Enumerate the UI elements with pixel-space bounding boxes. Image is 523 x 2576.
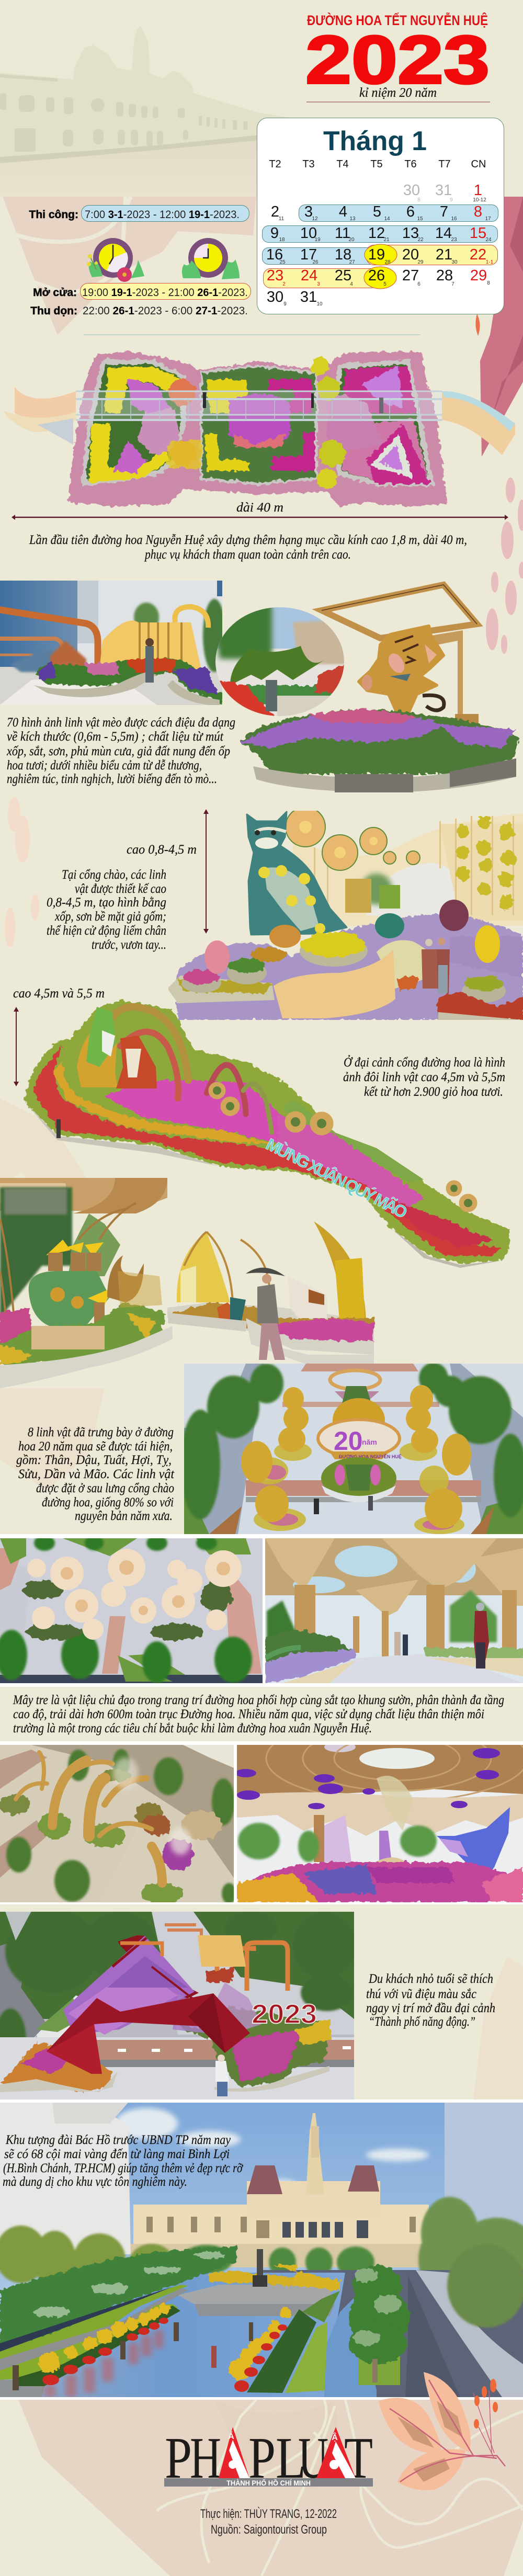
text block: statue area: (H.Bình Chánh, TP.HCM) giúp tăng thêm vẻ đẹp rực rỡ xyxy=(3,2161,243,2175)
calendar weekday row: T4 xyxy=(336,158,349,170)
calendar dates: 18 xyxy=(335,246,351,263)
schedule: thi công: Thi công: xyxy=(29,209,78,221)
calendar dates: 21 xyxy=(436,246,452,263)
faded background: city hall photo xyxy=(0,26,288,197)
calendar dates: 18 xyxy=(279,237,285,243)
photo: 20 years plaza aerial xyxy=(180,1363,523,1534)
calendar construction range highlight xyxy=(263,205,498,265)
arrow: height 4.5-5.5 m xyxy=(14,1007,19,1086)
photo: statue plaza and city hall xyxy=(0,2103,523,2397)
white separators xyxy=(0,1534,523,2400)
glass bridge xyxy=(3,387,515,455)
text block: eight mascots: gồm: Thân, Dậu, Tuất, Hợi, Tỵ, xyxy=(16,1453,172,1467)
dimension: bridge length xyxy=(12,501,508,520)
title xyxy=(305,12,490,100)
photo: bamboo arches aerial xyxy=(0,1745,236,1904)
big mai tree column xyxy=(349,2265,410,2364)
pot reflections xyxy=(44,2330,164,2397)
calendar dates: 22 xyxy=(417,237,424,243)
calendar dates: 7 xyxy=(440,203,448,220)
logo: Pháp Luật: P xyxy=(248,2426,276,2491)
calendar dates: 16 xyxy=(451,216,457,222)
left tree row xyxy=(0,2246,238,2350)
text block: young visitors: Du khách nhỏ tuổi sẽ thích xyxy=(368,1972,493,1986)
grass, road and hedge left xyxy=(0,2285,188,2360)
schedule: mở cửa: Mở cửa: xyxy=(33,287,77,299)
subtitle: kỉ niệm 20 năm xyxy=(359,86,437,100)
logo: Pháp Luật xyxy=(164,2426,373,2491)
schedule: mở cửa xyxy=(33,283,251,299)
text block: eight mascots: được đặt ở sau lưng cổng chào xyxy=(36,1481,174,1495)
background: peach ovals left xyxy=(5,797,39,947)
text band: bamboo material xyxy=(0,1683,523,1745)
calendar weekday row: T5 xyxy=(370,158,383,170)
city hall xyxy=(131,2113,429,2267)
calendar dates: 26 xyxy=(368,267,385,284)
calendar dates: 20 xyxy=(348,237,355,243)
logo: Pháp Luật: THÀNH PHỐ HỒ CHÍ MINH xyxy=(226,2478,311,2487)
calendar dates: 23 xyxy=(267,267,283,284)
text block: mascots: hoa tươi; dưới nhiều biểu cảm từ dễ thương, xyxy=(7,758,202,773)
calendar dates: 12 xyxy=(368,225,385,242)
calendar dates: 25 xyxy=(335,267,351,284)
calendar dates: 5 xyxy=(373,203,381,220)
logo: Pháp Luật: T xyxy=(344,2426,373,2491)
calendar dates: 17 xyxy=(300,246,317,263)
text block: gate mascots: trước, vươn tay... xyxy=(92,938,166,952)
calendar dates: 14 xyxy=(384,216,390,222)
calendar dates: 2 xyxy=(271,203,279,220)
text block: statue area xyxy=(3,2133,243,2189)
flower beds xyxy=(175,914,523,1020)
calendar dates: 19 xyxy=(368,246,385,263)
calendar dates: 29 xyxy=(470,267,487,284)
flower medallions xyxy=(209,1082,477,1212)
calendar dates: 1-1 xyxy=(486,259,494,265)
calendar dates: 15 xyxy=(417,216,423,222)
text block: eight mascots xyxy=(16,1425,175,1523)
logo: Pháp Luật: L xyxy=(276,2426,306,2491)
arrow: height 0.8-4.5 m xyxy=(203,809,209,934)
photo: 20 years plaza aerial: năm xyxy=(362,1438,377,1446)
upper gray plaza xyxy=(178,2285,335,2307)
text block: mascots xyxy=(6,716,235,786)
calendar dates: 27 xyxy=(402,267,419,284)
text block: gate mascots: thể hiện cử động liếm chân xyxy=(47,924,166,938)
icon: clock closing xyxy=(182,238,240,279)
bamboo backdrop xyxy=(293,813,523,926)
text block: statue area: sẽ có 68 cội mai vàng đến từ làng mai Bình Lợi xyxy=(4,2147,230,2161)
calendar dates: 24 xyxy=(485,237,492,243)
calendar dates: 4 xyxy=(339,203,347,220)
title: year 2023: 2023 xyxy=(305,21,490,98)
background: rose petal right xyxy=(475,197,523,457)
icon: clock opening xyxy=(87,238,144,282)
schedule: thi công: 7:00 3-1-2023 - 12:00 19-1-2023. xyxy=(85,209,240,221)
calendar dates: 24 xyxy=(301,267,317,284)
text block: eight mascots: đường hoa, giống 80% so với xyxy=(42,1495,174,1510)
text block: statue area: Khu tượng đài Bác Hồ trước UBND TP năm nay xyxy=(5,2133,231,2147)
photo: 20 years plaza aerial: ĐƯỜNG HOA NGUYỄN HUỆ xyxy=(339,1454,402,1459)
footer credit: Thực hiện: THÙY TRANG, 12-2022 xyxy=(200,2507,337,2521)
calendar weekday row: T2 xyxy=(269,158,281,170)
text block: gate mascots: 0,8-4,5 m, tạo hình bằng xyxy=(47,895,166,910)
boxes and checker xyxy=(345,879,371,913)
text block: gate mascots: Tại cổng chào, các linh xyxy=(62,868,166,882)
calendar dates: 10 xyxy=(316,301,323,307)
text block: eight mascots: hoa 20 năm qua sẽ được tái hiện, xyxy=(18,1439,173,1454)
calendar dates: 12 xyxy=(312,216,318,222)
calendar dates: 22 xyxy=(470,246,486,263)
text band: bamboo material: trường là một trong các tiêu chí bắt buộc khi làm đường hoa xuân Nguyễn Huệ. xyxy=(13,1721,372,1735)
photo: 2023 red gate xyxy=(0,1909,356,2100)
schedule: thu dọn: 22:00 26-1-2023 - 6:00 27-1-2023. xyxy=(83,305,248,317)
calendar dates: 13 xyxy=(402,225,419,242)
text block: eight mascots: 8 linh vật đã trưng bày ở đường xyxy=(28,1425,174,1439)
calendar weekday row: T7 xyxy=(438,158,451,170)
bamboo dome scene with cow, rooster and visitor xyxy=(118,1221,374,1365)
text block: statue area: mà dung dị cho khu vực tôn nghiêm này. xyxy=(3,2175,187,2189)
photo: cat gate street xyxy=(0,581,226,705)
hedge and lawn xyxy=(247,2309,316,2393)
footer credit: Nguồn: Saigontourist Group xyxy=(211,2523,327,2537)
text block: gate mascots: vật được thiết kế cao xyxy=(75,882,166,896)
text block: glass bridge xyxy=(29,533,467,562)
calendar dates: 4 xyxy=(350,281,353,287)
decoration: leaves xyxy=(379,2372,505,2490)
calendar dates: 6 xyxy=(406,203,415,220)
logo: Pháp Luật: U xyxy=(298,2426,328,2491)
label: height 4.5 and 5.5 m: cao 4,5m và 5,5 m xyxy=(13,986,105,1001)
arches xyxy=(107,1007,272,1132)
calendar dates: 9 xyxy=(450,197,453,203)
calendar dates: 5 xyxy=(383,281,386,287)
logo: Pháp Luật: P xyxy=(165,2426,192,2491)
dimension: bridge length: dài 40 m xyxy=(236,501,283,515)
text block: young visitors: thú với vũ điệu màu sắc xyxy=(366,1987,476,2001)
logo: Pháp Luật: H xyxy=(190,2426,221,2491)
calendar dates: 20 xyxy=(402,246,419,263)
calendar dates: 2 xyxy=(282,281,286,287)
text block: mascots: nghiêm túc, tinh nghịch, lười biếng đến tò mò... xyxy=(7,772,217,786)
statue and yellow apricot xyxy=(208,2271,335,2288)
text block: glass bridge: Lần đầu tiên đường hoa Nguyễn Huệ xây dựng thêm hạng mục cầu kính cao 1,8 m, dài 40 m, xyxy=(29,533,467,547)
road right and plaza ground xyxy=(262,2270,523,2397)
calendar dates: 3 xyxy=(304,203,313,220)
text block: young visitors: ngay vị trí mở đầu đại cảnh xyxy=(366,2001,495,2015)
calendar dates: 15 xyxy=(470,225,486,242)
calendar dates: 11 xyxy=(279,216,285,222)
calendar dates: 21 xyxy=(383,237,390,243)
right sidewalk xyxy=(416,2270,523,2397)
calendar dates: 17 xyxy=(485,216,491,222)
title line: event name: ĐƯỜNG HOA TẾT NGUYỄN HUỆ xyxy=(307,12,488,28)
text block: mascots: 70 hình ảnh linh vật mèo được cách điệu đa dạng xyxy=(7,716,235,730)
plaza anniversary sign: 20 xyxy=(334,1426,363,1456)
text block: mascots: về kích thước (0,6m - 5,5m) ; chất liệu từ mút xyxy=(7,730,224,744)
calendar dates: 31 xyxy=(300,289,317,305)
calendar dates xyxy=(266,182,494,307)
calendar dates: 16 xyxy=(266,246,283,263)
photo: bamboo canopy aerial xyxy=(0,1535,263,1683)
gate sign 2023: 2023 xyxy=(252,1999,317,2029)
text block: eight mascots: nguyên bản năm xưa. xyxy=(75,1509,173,1523)
calendar weekday row xyxy=(269,158,486,170)
display greeting text: MỪNG XUÂN QUÝ MÃO xyxy=(263,1134,411,1222)
calendar weekday row: T6 xyxy=(404,158,417,170)
text block: glass bridge: phục vụ khách tham quan toàn cảnh trên cao. xyxy=(144,548,351,562)
text block: gateway mascots: ảnh đôi linh vật cao 4,5m và 5,5m xyxy=(343,1070,505,1084)
calendar dates: 28 xyxy=(436,267,453,284)
calendar dates: 29 xyxy=(417,259,424,265)
calendar dates: 9 xyxy=(270,225,279,242)
calendar dates: 27 xyxy=(349,259,355,265)
lower right bed xyxy=(462,985,506,1003)
calendar dates: 8 xyxy=(487,280,490,286)
calendar dates: 1 xyxy=(474,182,482,199)
footer credit xyxy=(200,2507,337,2537)
text block: gate mascots xyxy=(47,868,166,952)
label: height 0.8-4.5 m: cao 0,8-4,5 m xyxy=(127,843,197,857)
text block: gateway mascots xyxy=(343,1055,505,1099)
logo: Pháp Luật: Á xyxy=(228,2431,234,2441)
schedule panel xyxy=(29,205,251,317)
swoosh flower display: gate scene xyxy=(25,1000,510,1268)
photo: canopy with purple cat xyxy=(235,1716,523,1902)
text block: gateway mascots: kết từ hơn 2.900 giỏ hoa tươi. xyxy=(364,1085,503,1099)
calendar dates: 8 xyxy=(474,203,482,220)
schedule: thi công xyxy=(29,205,249,222)
calendar heading: Tháng 1 xyxy=(323,126,427,156)
calendar dates: 31 xyxy=(435,182,452,199)
cat sculpture with flower bed xyxy=(241,585,519,792)
calendar dates: 6 xyxy=(417,281,420,287)
background: pink ovals right xyxy=(486,478,523,654)
calendar dates: 9 xyxy=(283,301,287,307)
red pots and apricot trees right xyxy=(229,2307,291,2380)
visitors xyxy=(13,2322,253,2390)
flower-covered cats xyxy=(77,1007,118,1087)
calendar dates: 7 xyxy=(451,281,454,287)
calendar dates: 10 xyxy=(300,225,317,242)
buffalo sculpture scene xyxy=(0,1178,173,1392)
small cats xyxy=(204,940,230,974)
calendar dates: 19 xyxy=(314,237,321,243)
text block: eight mascots: Sửu, Dần và Mão. Các linh vật xyxy=(18,1467,175,1481)
text block: mascots: xốp, sắt, sơn, phủ mùn cưa, giả đất nung đến ốp xyxy=(6,744,230,758)
photo: topiary cat circle xyxy=(215,607,344,716)
gate scene: teal cat xyxy=(167,807,523,1020)
calendar dates: 30 xyxy=(267,289,283,305)
flower bed plan xyxy=(69,351,447,507)
text block: gate mascots: xốp, sơn bề mặt giả gốm; xyxy=(54,910,166,924)
background shape: pink watercolor behind schedule xyxy=(0,197,256,335)
footer panel xyxy=(0,2372,523,2576)
calendar dates: 14 xyxy=(435,225,452,242)
big teal cat xyxy=(247,812,347,935)
text block: young visitors xyxy=(366,1972,495,2029)
calendar opening range highlight xyxy=(264,244,498,289)
calendar weekday row: T3 xyxy=(302,158,315,170)
calendar dates: 8 xyxy=(417,197,420,203)
photo: bamboo canopy walkway xyxy=(265,1538,523,1683)
calendar panel xyxy=(257,118,504,314)
calendar dates: 30 xyxy=(451,259,458,265)
flower plan with glass bridge xyxy=(3,351,515,507)
visitors xyxy=(422,949,439,989)
schedule: thu dọn: Thu dọn: xyxy=(30,305,77,317)
calendar dates: 30 xyxy=(403,182,420,199)
background: faint flowers xyxy=(0,1098,523,2100)
calendar dates: 26 xyxy=(312,259,319,265)
calendar dates: 25 xyxy=(279,259,286,265)
red pots and apricot trees left xyxy=(39,2303,170,2373)
calendar dates: 13 xyxy=(349,216,356,222)
calendar dates: 10-12 xyxy=(473,197,486,203)
calendar dates: 11 xyxy=(335,225,350,242)
calendar dates: 23 xyxy=(451,237,457,243)
calendar weekday row: CN xyxy=(471,158,486,170)
calendar dates: 3 xyxy=(317,281,320,287)
logo: Pháp Luật: Ậ xyxy=(332,2432,338,2442)
pinwheels xyxy=(286,807,420,870)
schedule: mở cửa: 19:00 19-1-2023 - 21:00 26-1-2023. xyxy=(82,287,248,299)
calendar dates: 28 xyxy=(384,259,391,265)
text block: young visitors: “Thành phố năng động.” xyxy=(369,2015,475,2029)
